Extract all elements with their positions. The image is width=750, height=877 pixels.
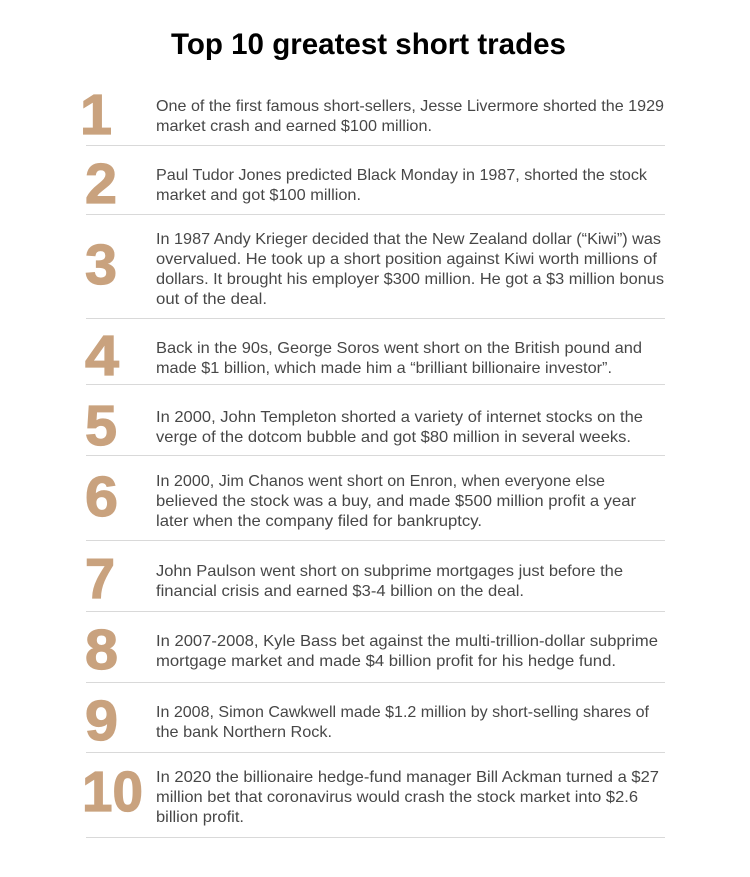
text 1: One of the first famous short-sellers, Jesse Livermore shorted the 1929 [156,98,664,115]
item 8 [85,618,658,682]
text 1 [156,98,664,135]
item 7 [85,547,623,611]
item 9 [85,689,650,753]
text 8: In 2007-2008, Kyle Bass bet against the multi-trillion-dollar subprime [156,633,658,650]
text 5 [156,409,643,446]
text 6: later when the company filed for bankruptcy. [156,513,482,530]
text 9: In 2008, Simon Cawkwell made $1.2 million by short-selling shares of [156,704,650,721]
item 6 [85,465,637,530]
item 3 [85,231,664,308]
text 10: million bet that coronavirus would crash the stock market into $2.6 [156,789,638,806]
text 6 [156,473,637,530]
number 1: 1 [80,83,112,147]
text 6: believed the stock was a buy, and made $500 million profit a year [156,493,637,510]
item 5 [85,394,643,458]
number 10: 10 [82,760,143,824]
text 3: In 1987 Andy Krieger decided that the New Zealand dollar (“Kiwi”) was [156,231,661,248]
text 9: the bank Northern Rock. [156,724,332,741]
text 2: Paul Tudor Jones predicted Black Monday in 1987, shorted the stock [156,167,648,184]
text 4 [156,340,642,377]
text 9 [156,704,650,741]
number 7: 7 [85,547,115,611]
text 8: mortgage market and made $4 billion profit for his hedge fund. [156,653,616,670]
number 5: 5 [85,394,117,458]
text 10 [156,769,659,826]
number 6: 6 [85,465,118,529]
text 5: verge of the dotcom bubble and got $80 million in several weeks. [156,429,631,446]
title: Top 10 greatest short trades [171,28,566,61]
text 10: In 2020 the billionaire hedge-fund manager Bill Ackman turned a $27 [156,769,659,786]
text 2: market and got $100 million. [156,187,361,204]
text 7: John Paulson went short on subprime mortgages just before the [156,563,623,580]
text 3: overvalued. He took up a short position against Kiwi worth millions of [156,251,658,268]
item 4 [85,324,642,388]
text 3: out of the deal. [156,291,267,308]
item 1 [80,83,664,147]
text 5: In 2000, John Templeton shorted a variety of internet stocks on the [156,409,643,426]
text 2 [156,167,648,204]
text 7: financial crisis and earned $3-4 billion on the deal. [156,583,524,600]
text 8 [156,633,658,670]
text 1: market crash and earned $100 million. [156,118,432,135]
text 7 [156,563,623,600]
text 4: made $1 billion, which made him a “brilliant billionaire investor”. [156,360,612,377]
number 2: 2 [85,152,117,216]
text 3: dollars. It brought his employer $300 million. He got a $3 million bonus [156,271,664,288]
number 4: 4 [85,324,119,388]
number 9: 9 [85,689,118,753]
text 10: billion profit. [156,809,244,826]
text 4: Back in the 90s, George Soros went short on the British pound and [156,340,642,357]
text 3 [156,231,664,308]
item 10 [82,760,659,826]
item 2 [85,152,648,216]
text 6: In 2000, Jim Chanos went short on Enron, when everyone else [156,473,605,490]
number 3: 3 [85,233,117,297]
number 8: 8 [85,618,118,682]
